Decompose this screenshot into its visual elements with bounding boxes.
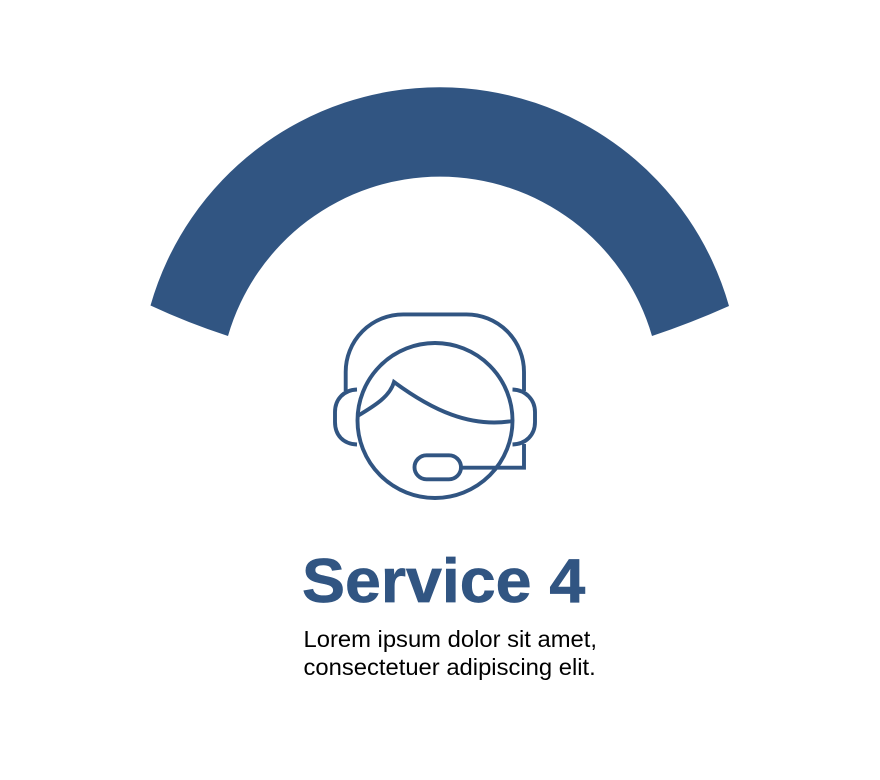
arc band [150,87,729,336]
title: Service 4 [302,547,585,616]
right ear cup [512,390,535,444]
icon: headset agent [335,314,535,498]
hair fringe [358,382,512,423]
body text: Lorem ipsum dolor sit amet, [304,626,597,652]
head circle [358,343,512,498]
left ear cup [335,390,357,444]
hair outline and mic arm [346,314,524,468]
microphone [414,455,461,479]
body text: consectetuer adipiscing elit. [304,654,596,680]
